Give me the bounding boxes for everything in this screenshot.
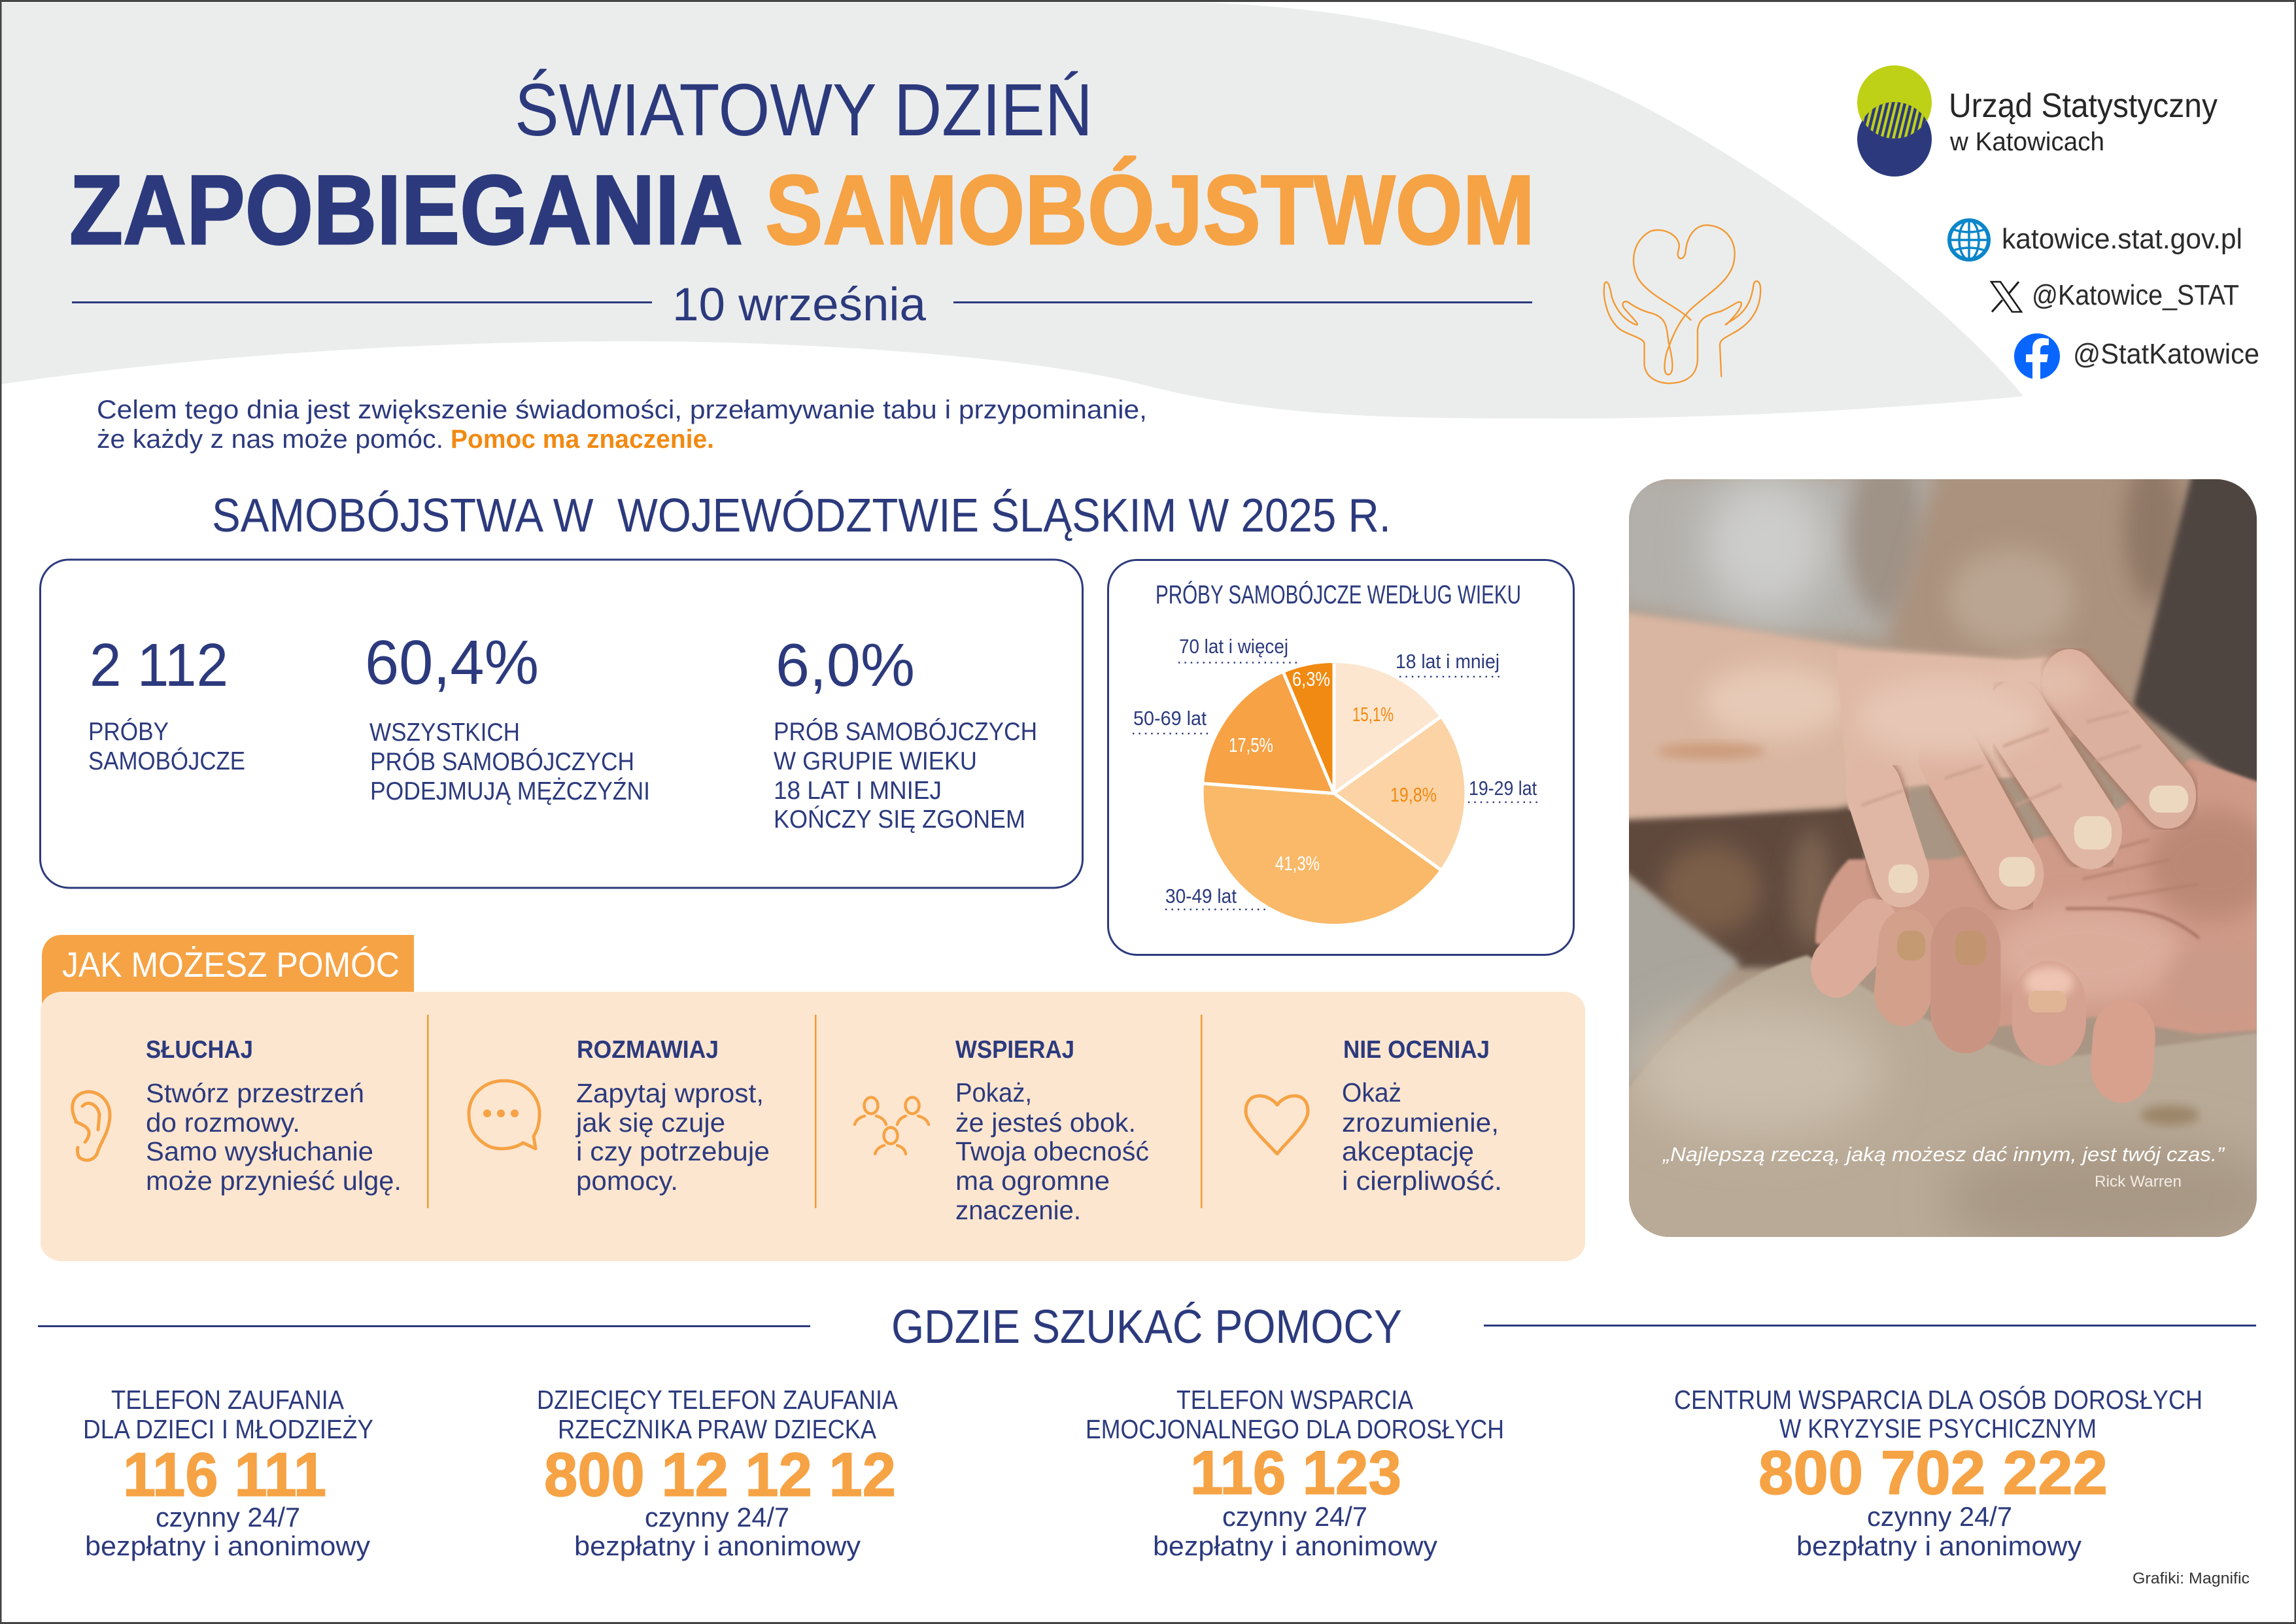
stat: 6,0% fatal under 18: [774, 631, 1037, 834]
helpline: 800 12 12 12: [537, 1385, 899, 1561]
helpline: 116 111: TELEFON ZAUFANIA: [111, 1385, 345, 1415]
quote: [1662, 1146, 2225, 1187]
quote: Rick Warren: [2095, 1173, 2182, 1191]
heading: where to seek help: [38, 1301, 2256, 1353]
item: talk: ROZMAWIAJ: [577, 1036, 719, 1064]
stat: 6,0% fatal under 18: PRÓB SAMOBÓJCZYCH: [774, 718, 1037, 746]
helpline: 116 123: EMOCJONALNEGO DLA DOROSŁYCH: [1086, 1414, 1504, 1444]
item: support: ma ogromne: [955, 1166, 1110, 1196]
heading: suicides in Silesia 2025: SAMOBÓJSTWA W WOJEWÓDZTWIE ŚLĄSKIM W 2025 R.: [212, 489, 1391, 542]
helpline: 116 123: czynny 24/7: [1222, 1501, 1367, 1532]
helpline: 116 111: bezpłatny i anonimowy: [85, 1531, 370, 1561]
helpline: 800 12 12 12: 800 12 12 12: [544, 1440, 896, 1510]
quote: „Najlepszą rzeczą, jaką możesz dać innym, jest twój czas.”: [1662, 1143, 2225, 1166]
item: support: WSPIERAJ: [955, 1036, 1074, 1064]
item: listen: Stwórz przestrzeń: [146, 1078, 364, 1108]
date with side rules: [72, 279, 1532, 331]
helpline: 800 702 222: czynny 24/7: [1867, 1501, 2012, 1532]
helpline: 116 111: 116 111: [123, 1440, 326, 1510]
helpline: 800 12 12 12: DZIECIĘCY TELEFON ZAUFANIA: [537, 1385, 899, 1415]
lower fingers: [1836, 928, 1874, 968]
stat: 60,4% men: [365, 628, 650, 805]
logo: Urząd Statystyczny w Katowicach: [1855, 65, 2218, 177]
pie values: 19,8%: [1390, 783, 1437, 806]
icon: X: [1991, 282, 2021, 312]
stat: 6,0% fatal under 18: KOŃCZY SIĘ ZGONEM: [774, 805, 1025, 834]
helpline: 800 702 222: 800 702 222: [1758, 1438, 2108, 1508]
helpline: 800 702 222: bezpłatny i anonimowy: [1796, 1531, 2082, 1561]
pie age labels: 19-29 lat: [1469, 777, 1537, 800]
stat: 2 112 attempts: [88, 631, 245, 775]
credit: Grafiki: Magnific: [2133, 1570, 2250, 1587]
stat: 60,4% men: PRÓB SAMOBÓJCZYCH: [370, 748, 634, 776]
helpline: 116 111: czynny 24/7: [156, 1502, 300, 1532]
helpline: 800 12 12 12: bezpłatny i anonimowy: [574, 1531, 861, 1561]
pie values: 17,5%: [1229, 734, 1273, 756]
logo mark: [1855, 65, 1932, 177]
item: talk: pomocy.: [576, 1166, 678, 1196]
helpline: 800 702 222: CENTRUM WSPARCIA DLA OSÓB DOROSŁYCH: [1674, 1385, 2202, 1415]
pie age labels: [1133, 635, 1540, 909]
stat: 60,4% men: PODEJMUJĄ MĘŻCZYŹNI: [370, 777, 650, 805]
intro text: [97, 396, 1147, 454]
helpline: 116 111: DLA DZIECI I MŁODZIEŻY: [83, 1414, 373, 1444]
pie values: 15,1%: [1352, 703, 1394, 726]
icon: speech bubble: [469, 1081, 540, 1149]
tab: how you can help: [42, 935, 414, 1020]
helpline: 116 111: [83, 1385, 373, 1561]
pie age labels: 50-69 lat: [1133, 707, 1207, 730]
item: support: znaczenie.: [955, 1195, 1081, 1225]
item: talk: [469, 1036, 770, 1196]
icon: heart: [1246, 1096, 1308, 1154]
stat: 6,0% fatal under 18: 6,0%: [776, 631, 915, 699]
photo image: [1629, 479, 2257, 1237]
stat: 2 112 attempts: PRÓBY: [88, 718, 169, 746]
icon: Facebook: [2014, 333, 2060, 379]
item: talk: i czy potrzebuje: [576, 1136, 770, 1166]
item: listen: SŁUCHAJ: [146, 1036, 253, 1064]
logo text: [1949, 87, 2218, 156]
item: listen: [73, 1036, 402, 1196]
panel: how you can help: [41, 992, 1585, 1261]
helpline: 800 12 12 12: czynny 24/7: [645, 1502, 789, 1532]
item: support: [855, 1036, 1149, 1225]
icon: hands holding heart: [1604, 225, 1760, 383]
intro text: Celem tego dnia jest zwiększenie świadomości, przełamywanie tabu i przypominanie,: [97, 396, 1147, 424]
photo: elderly hands with quote: [1629, 479, 2257, 1237]
tab: how you can help: JAK MOŻESZ POMÓC: [62, 945, 400, 985]
item: listen: Samo wysłuchanie: [146, 1136, 373, 1166]
item: talk: Zapytaj wprost,: [576, 1078, 764, 1108]
panel: attempts by age: [1108, 560, 1573, 955]
panel: key statistics: [41, 560, 1083, 888]
helpline: 800 12 12 12: RZECZNIKA PRAW DZIECKA: [558, 1414, 877, 1444]
stat: 60,4% men: 60,4%: [365, 628, 539, 698]
item: support: Twoja obecność: [955, 1136, 1149, 1166]
item: talk: jak się czuje: [575, 1108, 725, 1138]
stat: 6,0% fatal under 18: 18 LAT I MNIEJ: [774, 777, 942, 805]
helpline: 116 123: TELEFON WSPARCIA: [1176, 1385, 1414, 1415]
title: [69, 69, 1535, 265]
pie chart: [1202, 662, 1466, 926]
stat: 2 112 attempts: 2 112: [90, 631, 228, 699]
logo text: w Katowicach: [1949, 127, 2104, 156]
intro text: że każdy z nas może pomóc.: [97, 425, 443, 454]
icon: globe: [1949, 220, 1989, 260]
title: SAMOBÓJSTWOM: [765, 154, 1535, 265]
intro text: Pomoc ma znaczenie.: [451, 425, 714, 454]
item: do not judge: NIE OCENIAJ: [1343, 1036, 1490, 1064]
icon: three people: [855, 1097, 929, 1154]
item: do not judge: Okaż: [1342, 1077, 1401, 1108]
title: ŚWIATOWY DZIEŃ: [515, 69, 1093, 151]
item: do not judge: zrozumienie,: [1342, 1108, 1499, 1138]
Facebook account: @StatKatowice: [2073, 338, 2259, 370]
helpline: 800 702 222: W KRYZYSIE PSYCHICZNYM: [1779, 1413, 2097, 1444]
item: do not judge: i cierpliwość.: [1342, 1166, 1502, 1196]
pie values: [1229, 668, 1437, 875]
heading: where to seek help: GDZIE SZUKAĆ POMOCY: [891, 1301, 1402, 1353]
header background shape: [0, 3, 2023, 418]
title: ZAPOBIEGANIA: [69, 154, 743, 265]
helpline: 116 123: bezpłatny i anonimowy: [1153, 1531, 1437, 1561]
lower hand base: [1815, 758, 2269, 1034]
item: listen: może przynieść ulgę.: [146, 1166, 402, 1196]
logo text: Urząd Statystyczny: [1949, 87, 2218, 125]
pie values: 41,3%: [1275, 852, 1320, 875]
item: do not judge: akceptację: [1342, 1136, 1474, 1166]
date with side rules: 10 września: [672, 279, 927, 331]
X account: @Katowice_STAT: [2032, 279, 2239, 311]
item: listen: do rozmowy.: [146, 1108, 300, 1138]
stat: 60,4% men: WSZYSTKICH: [369, 719, 520, 747]
stat: 6,0% fatal under 18: W GRUPIE WIEKU: [774, 747, 977, 775]
website link: katowice.stat.gov.pl: [2002, 223, 2242, 255]
helpline: 800 702 222: [1674, 1385, 2202, 1561]
item: support: Pokaż,: [955, 1077, 1032, 1108]
pie age labels: 18 lat i mniej: [1396, 650, 1499, 673]
upper hand: [1847, 654, 2074, 812]
item: support: że jesteś obok.: [955, 1108, 1136, 1138]
icon: ear: [73, 1092, 110, 1160]
website link: [1949, 220, 2242, 260]
stat: 2 112 attempts: SAMOBÓJCZE: [88, 747, 245, 775]
helpline: 116 123: [1086, 1385, 1504, 1561]
helpline: 116 123: 116 123: [1190, 1438, 1401, 1508]
chart title: PRÓBY SAMOBÓJCZE WEDŁUG WIEKU: [1156, 580, 1521, 609]
pie age labels: 30-49 lat: [1165, 885, 1237, 907]
pie age labels: 70 lat i więcej: [1179, 635, 1288, 658]
Facebook account: [2014, 333, 2259, 379]
pie values: 6,3%: [1292, 668, 1330, 690]
item: do not judge: [1246, 1036, 1502, 1196]
